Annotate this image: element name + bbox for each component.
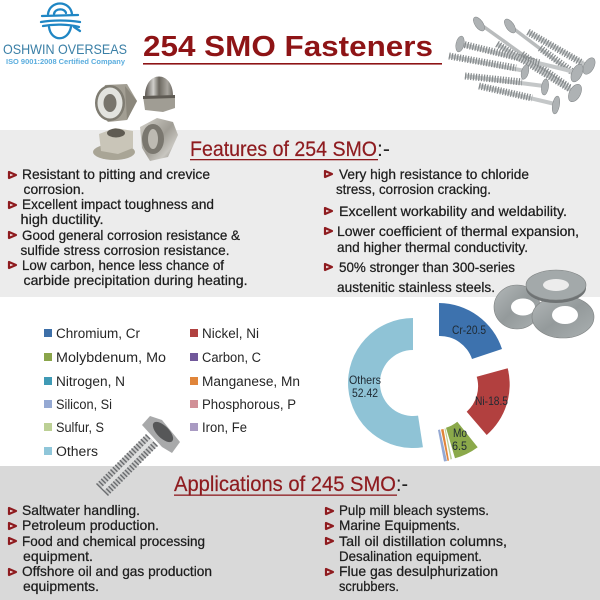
slice: molybdenum: Mo xyxy=(453,426,467,440)
image: screws xyxy=(449,15,598,114)
applications list: left column xyxy=(9,502,212,594)
features list: right column: Lower coefficient of thermal expansion, xyxy=(337,223,579,239)
screw xyxy=(454,35,586,84)
legend item: carbon: Carbon, C xyxy=(202,350,261,365)
flange nut xyxy=(93,128,135,160)
features list: right column: and higher thermal conductivity. xyxy=(337,239,528,255)
applications list: left column: equipment. xyxy=(23,548,93,564)
applications list: right column: Pulp mill bleach systems. xyxy=(339,502,489,518)
bullet xyxy=(325,228,332,234)
logo: Oshwin Overseas xyxy=(3,4,127,66)
features list: left column: corrosion. xyxy=(24,181,84,197)
applications list: right column: Desalination equipment. xyxy=(339,548,482,564)
features list: right column: Excellent workability and weldability. xyxy=(339,203,567,219)
bullet xyxy=(9,172,16,178)
applications list: right column: scrubbers. xyxy=(339,578,399,594)
features list: left column xyxy=(9,166,248,288)
features heading: :- xyxy=(377,138,390,161)
bullet xyxy=(326,508,333,514)
bullet xyxy=(9,523,16,529)
legend item: molybdenum: Molybdenum, Mo xyxy=(56,350,166,365)
icon: logo globe xyxy=(41,4,80,38)
bullet xyxy=(325,171,332,177)
legend item: manganese: Manganese, Mn xyxy=(202,374,300,389)
washer xyxy=(526,270,586,303)
certification line: ISO 9001:2008 Certified Company xyxy=(6,57,126,66)
applications list: left column: Saltwater handling. xyxy=(22,502,140,518)
slice: chromium: Cr-20.5 xyxy=(452,323,486,337)
bullet xyxy=(9,202,16,208)
bullet xyxy=(326,538,333,544)
features list: left column: Low carbon, hence less chance of xyxy=(22,257,224,273)
bullet xyxy=(9,569,16,575)
slice: nickel: Ni-18.5 xyxy=(475,394,508,408)
applications list: right column xyxy=(326,502,507,594)
legend item: iron: Iron, Fe xyxy=(202,420,247,435)
features heading: Features of 254 SMO xyxy=(190,138,377,161)
legend item: phosphorous: Phosphorous, P xyxy=(202,397,296,412)
legend item: nitrogen: Nitrogen, N xyxy=(56,374,125,389)
applications list: left column: Petroleum production. xyxy=(22,517,159,533)
washer xyxy=(494,285,540,329)
features list: left column: Excellent impact toughness and xyxy=(22,196,214,212)
legend xyxy=(44,326,300,459)
bullet xyxy=(9,508,16,514)
bullet xyxy=(9,538,16,544)
features list: right column: 50% stronger than 300-series xyxy=(339,259,515,275)
legend item: others: Others xyxy=(56,444,98,459)
company name: OSHWIN OVERSEAS xyxy=(3,41,127,57)
slice: molybdenum xyxy=(446,422,478,458)
features list: right column: stress, corrosion cracking. xyxy=(336,181,491,197)
features list: right column: Very high resistance to chloride xyxy=(339,166,529,182)
slice: molybdenum: 6.5 xyxy=(452,439,467,453)
features list: right column xyxy=(325,166,579,295)
applications list: right column: Tall oil distillation columns, xyxy=(339,533,507,549)
slice: others xyxy=(348,318,423,448)
bullet xyxy=(325,264,332,270)
applications list: left column: Offshore oil and gas production xyxy=(22,563,212,579)
applications list: right column: Flue gas desulphurization xyxy=(339,563,498,579)
slice: others: Others xyxy=(349,373,381,387)
image: nuts xyxy=(93,76,178,161)
screw xyxy=(465,76,550,95)
image: bolt xyxy=(102,416,180,490)
bullet xyxy=(326,523,333,529)
hex nut xyxy=(140,118,178,161)
screw xyxy=(528,32,598,76)
image: washers xyxy=(494,270,594,338)
bolt head xyxy=(142,416,180,453)
applications list: left column: equipments. xyxy=(23,578,99,594)
screw xyxy=(497,44,584,104)
bullet xyxy=(326,569,333,575)
screw xyxy=(449,56,530,80)
washer xyxy=(532,296,594,338)
slice: chromium xyxy=(439,303,502,359)
legend item: silicon: Silicon, Si xyxy=(56,397,112,412)
screw xyxy=(471,15,570,88)
features list: left column: Resistant to pitting and crevice xyxy=(22,166,210,182)
title: 254 SMO Fasteners xyxy=(143,31,433,63)
slice: nickel xyxy=(467,368,510,435)
applications list: right column: Marine Equipments. xyxy=(339,517,460,533)
bullet xyxy=(325,208,332,214)
legend item: nickel: Nickel, Ni xyxy=(202,326,259,341)
features list: left column: sulfide stress corrosion resistance. xyxy=(20,242,230,258)
features list: right column: austenitic stainless steels. xyxy=(337,279,495,295)
features list: left column: Good general corrosion resistance & xyxy=(22,227,241,243)
bullet xyxy=(9,232,16,238)
legend item: chromium: Chromium, Cr xyxy=(56,326,140,341)
panel: applications background xyxy=(0,466,600,600)
slice: others: 52.42 xyxy=(352,386,378,400)
applications heading: :- xyxy=(396,473,408,496)
bullet xyxy=(9,262,16,268)
cap nut xyxy=(143,76,175,112)
panel: features background xyxy=(0,130,600,297)
bolt shaft xyxy=(102,440,152,490)
screw xyxy=(502,17,578,76)
nylon lock nut xyxy=(95,84,137,122)
screw xyxy=(479,86,561,114)
legend item: sulfur: Sulfur, S xyxy=(56,420,104,435)
donut chart xyxy=(348,303,510,462)
slices: minor elements xyxy=(438,428,452,462)
features list: left column: high ductility. xyxy=(20,211,104,227)
applications heading: Applications of 245 SMO xyxy=(174,473,396,496)
features list: left column: carbide precipitation during heating. xyxy=(24,272,248,288)
applications list: left column: Food and chemical processing xyxy=(22,533,205,549)
